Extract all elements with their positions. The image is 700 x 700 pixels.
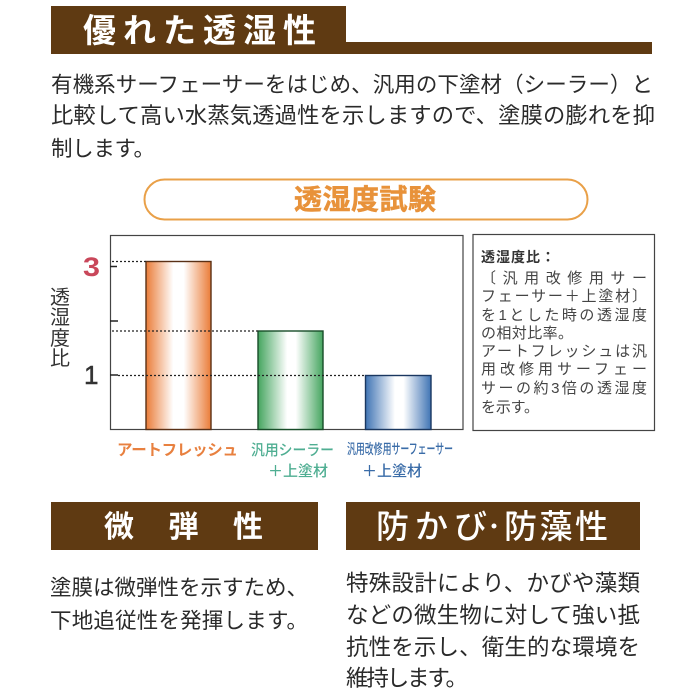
text block: 防かび・防藻性: 維持します。 [346,666,468,691]
note box: の相対比率。 [481,325,573,342]
intro paragraph: 有機系サーフェーサーをはじめ、汎用の下塗材（シーラー）と [51,73,653,97]
text block: 防かび・防藻性 [346,571,640,691]
text block: 微弾性: 下地追従性を発揮します。 [50,609,308,633]
bar: アートフレッシュ [146,262,211,430]
bar chart: 透湿度比 [110,236,463,430]
y-axis value: 3: 3 [83,252,100,282]
y-axis label: 透湿度比: 度 [50,327,70,350]
note box: 〔汎用改修用サー [481,270,647,287]
bar label: 汎用シーラー＋上塗材 [251,442,334,480]
heading: 微弾性 [51,502,318,550]
intro paragraph [51,73,655,161]
heading: 防かび・防藻性: 防かび [376,508,487,545]
heading: 防かび・防藻性: 防藻性 [504,508,608,545]
heading: 微弾性: 微弾性 [104,511,263,544]
note box: サーの約3倍の透湿度 [481,380,647,397]
note box: アートフレッシュは汎 [481,343,647,360]
note box: を1とした時の透湿度 [481,307,647,324]
pill heading: 透湿度試験: 透湿度試験 [294,184,436,215]
note box [473,234,654,430]
note box: を示す。 [481,399,539,416]
y-axis label: 透湿度比: 透 [50,286,70,309]
text block: 防かび・防藻性: 抗性を示し、衛生的な環境を [346,635,640,660]
intro paragraph: 制します。 [51,137,155,161]
text block: 防かび・防藻性: などの微生物に対して強い抵 [346,603,640,628]
bar: 汎用シーラー [258,331,323,430]
text block: 防かび・防藻性: 特殊設計により、かびや藻類 [346,571,640,596]
heading: 防かび・防藻性 [346,502,640,550]
heading: 優れた透湿性 [51,6,652,54]
pill heading: 透湿度試験 [144,180,588,220]
bar label: 汎用改修用サーフェーサー＋上塗材 [347,441,453,480]
text block: 微弾性 [50,576,308,633]
intro paragraph: 比較して高い水蒸気透過性を示しますので、塗膜の膨れを抑 [51,103,655,128]
bar label: アートフレッシュ: アートフレッシュ [117,442,238,459]
bar label: 汎用シーラー＋上塗材: 汎用シーラー [251,442,334,459]
y-axis label: 透湿度比: 比 [50,347,70,370]
bar label: 汎用シーラー＋上塗材: ＋上塗材 [268,463,328,480]
bar label: 汎用改修用サーフェーサー＋上塗材: ＋上塗材 [362,463,422,480]
bar: 汎用改修用サーフェーサー [366,376,431,430]
y-axis label: 透湿度比 [50,286,70,370]
text block: 微弾性: 塗膜は微弾性を示すため、 [50,576,308,600]
note box: フェーサー＋上塗材〕 [481,288,647,305]
y-axis label: 透湿度比: 湿 [50,306,70,329]
bar label: 汎用改修用サーフェーサー＋上塗材: 汎用改修用サーフェーサー [347,441,453,457]
note box: 透湿度比： [481,249,555,265]
note box: 用改修用サーフェー [481,361,647,378]
y-axis value: 1: 1 [84,360,98,390]
heading: 優れた透湿性: 優れた透湿性 [83,12,316,49]
